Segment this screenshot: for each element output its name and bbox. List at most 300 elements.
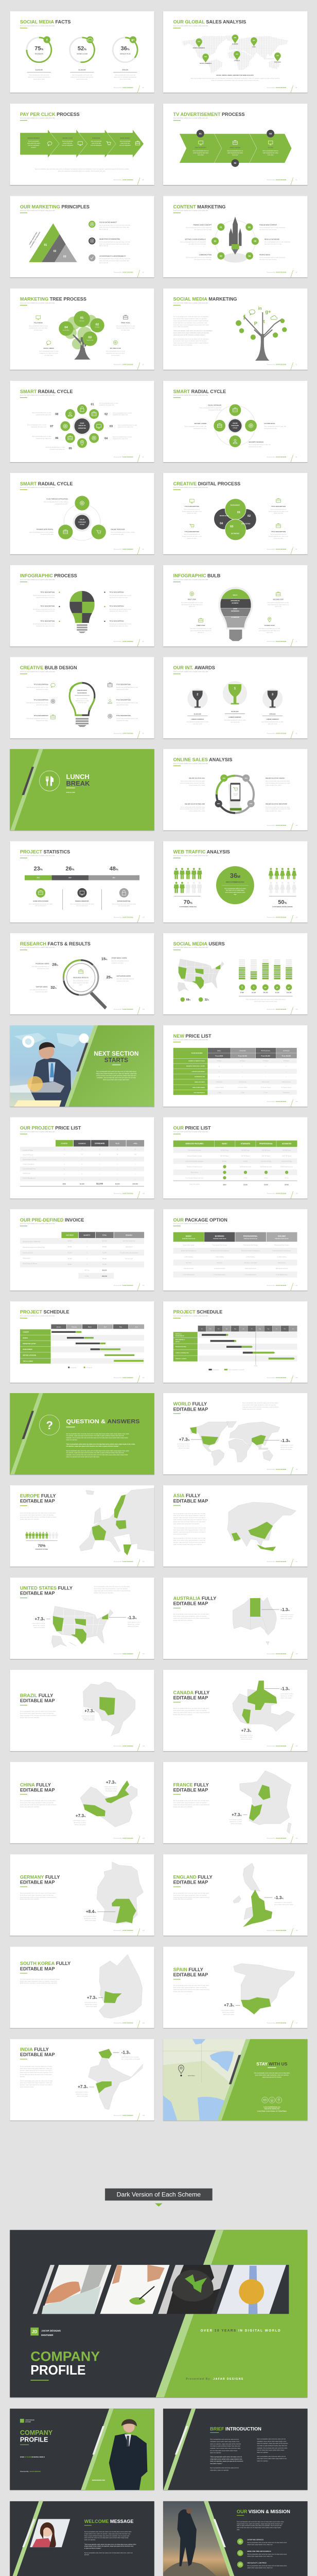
diagonal band xyxy=(10,749,43,831)
price table: $1,000 xyxy=(80,1183,84,1185)
body text: quasi architecto beatae vitae dicta sunt explicabo. xyxy=(173,1544,202,1546)
title: beatae vitae dicta sunt explicabo. xyxy=(173,1991,193,1993)
principle list: OBJECTIVES OF MARKETING xyxy=(99,238,120,240)
price table: Number of Pages xyxy=(23,1150,33,1151)
invoice table: 1 xyxy=(86,1258,87,1260)
price table: 2 Year xyxy=(241,1091,244,1093)
notes: Sed ut persp iciatis unde omnis iste natus xyxy=(181,806,205,808)
note text: requaemis iste natus error xyxy=(113,438,128,440)
footer: 117 xyxy=(295,1561,298,1563)
map stats: -1.3% xyxy=(280,1686,290,1691)
footer: Presented By: JAFAR DESIGNS xyxy=(267,1100,287,1103)
title: beatae vitae dicta sunt explicabo. xyxy=(94,1591,114,1594)
map stats: Lorem ipsum is only a xyxy=(128,1622,140,1623)
pin labels: 72% xyxy=(276,56,279,57)
notes xyxy=(184,404,286,448)
node labels: FINDING GOOD CONCEPT xyxy=(193,224,212,226)
prize text: eab requ omnis xyxy=(193,723,202,725)
heading and text: rem aperiam, eaque ipsa quae ab illo inventore vera hatis et quasi architecto beatae vitae dicta sunt xyxy=(66,1435,124,1437)
map stats: dummy text, to show xyxy=(222,2011,234,2013)
brand mark: JAFAR DESIGNS xyxy=(41,2330,61,2332)
tree diagram: Print Ads xyxy=(95,327,100,328)
slide: our price list xyxy=(163,1117,308,1198)
pin labels: AFRICA xyxy=(234,60,240,62)
step text: unde requaemis iste natus xyxy=(227,152,243,154)
footer: 89 xyxy=(295,271,297,273)
price table: From $6,000 xyxy=(282,1055,291,1057)
social icons and counts: t xyxy=(253,986,254,989)
body text: "Sed ut perspiciatis unde omnis iste natus error sit volup tatem accus antium dolor xyxy=(84,2543,136,2545)
slide: brief introduction xyxy=(163,2409,308,2490)
notes: sereqauemis iste alius xyxy=(41,533,54,535)
map stats xyxy=(82,1708,95,1721)
step text: TV ADS xyxy=(268,146,273,148)
title: SOUTH KOREA FULLY xyxy=(20,1961,71,1966)
slide: creative bulb design xyxy=(10,657,154,738)
price table: 500 MB Share xyxy=(241,1149,250,1151)
body text: accus antium dolor eaque laudantium totam rem aperiam, xyxy=(173,332,209,334)
notes: Sed eba gut perspiciatis lorem or und xyxy=(26,702,48,704)
package table: Anti Virus xyxy=(186,1262,192,1264)
outlined bulb: patteran lorem or unde xyxy=(76,700,89,702)
labels: FACEBOOK USERS xyxy=(36,962,49,964)
title: Insert your short subtitle here to explain a little about title xyxy=(173,1223,208,1225)
footer xyxy=(267,1007,298,1014)
footer: Presented By: JAFAR DESIGNS xyxy=(267,640,287,642)
map stats: -1.3% xyxy=(274,1895,284,1900)
notes: Sed ut persp iciatis unde omnis iste natus xyxy=(266,806,290,808)
body text column two: volup tatem accus antium dolor eaque lauda nt ium, xyxy=(257,2458,287,2460)
notes xyxy=(181,592,289,634)
pin labels: ASIA xyxy=(252,46,256,48)
price table: Assured Monthly Storage xyxy=(187,1155,202,1157)
node labels: 05 xyxy=(254,240,257,243)
slide: research facts and results xyxy=(10,933,154,1014)
body text: volup tatem accus antium dolor eaque lauda nt ium, xyxy=(210,2458,242,2460)
footer xyxy=(267,1652,298,1659)
footer: 124 xyxy=(143,1929,145,1931)
node labels: 03 xyxy=(220,255,222,257)
step text: Sed ut perspiciatis lorem or xyxy=(227,150,243,152)
social icons and counts: 356.2M xyxy=(287,991,292,993)
price table: From $2,000 xyxy=(238,1055,247,1057)
ring: sound cloud 52%: natus error sit voluptatem accusantium xyxy=(71,76,93,78)
heading: OVER 10 YEARS IN DIGITAL WORLD xyxy=(20,2456,45,2458)
footer: Presented By: JAFAR DESIGNS xyxy=(267,1837,287,1839)
slide: stay with us xyxy=(163,2039,308,2121)
side notes xyxy=(29,315,135,356)
node labels xyxy=(180,224,290,260)
body text: accus antium dolor eaque laudantium totam rem aperiam, xyxy=(173,340,207,342)
labels: requaemis iste natus xyxy=(37,968,49,970)
notes: requaemis iste natus error store xyxy=(110,596,128,598)
title: eaque ipsa quae ab illo inventore vera hatis et quasi architecto xyxy=(173,1617,210,1619)
price table: 3 Free xyxy=(264,1177,268,1179)
footer: Presented By: JAFAR DESIGNS xyxy=(114,1837,133,1839)
package table: 1000 Email Accounts xyxy=(275,1267,288,1269)
title: TV ADVERTISEMENT PROCESS xyxy=(173,112,245,117)
footer xyxy=(114,1652,145,1659)
title: Insert your short subtitle here to explain a little about title xyxy=(173,209,208,211)
petal labels: 04 xyxy=(220,522,223,525)
radial diagram: AREAS OF xyxy=(78,425,86,427)
body text: voluptatem accus antium dolor eaque lauda nt ium, xyxy=(210,2441,240,2443)
step text: PHOTOGRAPHY xyxy=(195,146,206,148)
side notes: sholup iste dolor xyxy=(187,512,197,514)
side notes: sholup iste dolor xyxy=(274,512,283,514)
pin labels: 22% xyxy=(236,54,239,55)
invoice table: $5,000 xyxy=(102,1258,107,1260)
title: Insert your short subtitle here to explain a little about title xyxy=(173,579,208,581)
body text: beatae vitae dicta sunt explicabo. xyxy=(173,344,193,346)
footer: Presented By: JAFAR DESIGNS xyxy=(267,456,287,458)
price table xyxy=(173,1048,297,1095)
gantt chart: PROTOTYPE LAYOUT xyxy=(23,1343,36,1345)
package table: Professional Web Design xyxy=(243,1244,258,1246)
title: EDITABLE MAP xyxy=(173,1880,208,1885)
body text: unde omnis iste natus error sit volup tatem accus antium dolor emque lauda xyxy=(237,2527,281,2529)
timeline bar: 2013 xyxy=(37,878,40,879)
timeline bar: 2015 xyxy=(113,878,115,879)
notes: FIRST STEP xyxy=(188,599,196,601)
south korea map xyxy=(99,1954,143,2019)
cycle diagram: ONLINE xyxy=(80,519,85,521)
title xyxy=(20,1494,57,1520)
germany map xyxy=(97,1862,144,1923)
title: EDITABLE MAP xyxy=(20,1499,55,1504)
contact text: STAY WITH US xyxy=(256,2061,288,2066)
caption: dicta sunt voluptatem accusantium dolor sunt explicabo. Sed ut perspic iatis unde. xyxy=(58,170,106,172)
footer: 85 xyxy=(295,87,297,89)
price table: ✕ xyxy=(64,1168,65,1170)
side notes: Sed ut perspiciatis lorem or xyxy=(271,509,286,510)
body text column two: totam rem aperiam. xyxy=(257,2460,269,2462)
invoice table: Domain and Host xyxy=(23,1251,33,1253)
node labels: iste natus error store sit volup xyxy=(195,258,212,260)
footer xyxy=(267,1836,298,1843)
side notes: TITLE DESCRIPTION xyxy=(185,531,199,533)
body text: "Sed ut perspiciatis unde omnis iste natus error sit voluptatem xyxy=(173,330,213,332)
footer: Presented By: JAFAR DESIGNS xyxy=(267,1745,287,1747)
title xyxy=(20,850,70,858)
heading xyxy=(30,2348,100,2381)
title xyxy=(20,573,77,582)
notes: SECURE LAYERS xyxy=(194,422,206,425)
gantt chart: April xyxy=(104,1326,107,1328)
contact text: www.lorem-website.com xyxy=(265,2108,280,2110)
footer: 104 xyxy=(143,1008,145,1010)
bulb labels: APPROPRIATE xyxy=(231,600,240,602)
notes: requaemis iste natus xyxy=(116,719,129,721)
prize text: LOREM COMPANY xyxy=(191,718,204,720)
heading and text: voepilcabo. Sed ut persipi iatis unde omnis iste natus error sit volup xyxy=(97,1076,136,1078)
title: accus antium dolor eaque laudantium, totam rem aperiam, xyxy=(173,1894,207,1896)
footer: Presented By: JAFAR DESIGNS xyxy=(114,1193,133,1195)
map stats: text, to show others a text space xyxy=(121,2058,140,2060)
prize text: LOREM COMPANY xyxy=(228,716,241,718)
radial diagram: SOME xyxy=(80,422,84,424)
invoice table: 2 xyxy=(86,1240,87,1242)
notes: requaemis iste natus error store xyxy=(110,625,128,627)
price table: 4 Pages xyxy=(217,1060,222,1062)
title: Insert your short subtitle here to explain a little about title xyxy=(173,1039,208,1041)
price table: ✓ xyxy=(99,1164,100,1165)
petal labels: PHOTOGRAPHY xyxy=(231,505,240,506)
title: OUR PROJECT PRICE LIST xyxy=(20,1125,81,1130)
price table: Professional MySQL Database xyxy=(186,1160,204,1162)
footer: Presented By: JAFAR DESIGNS xyxy=(267,1008,287,1010)
side notes: Sed ut perspiciatis lorem or xyxy=(271,534,286,535)
gantt chart: Sep xyxy=(267,1329,270,1330)
price table: Contact/Enquiry Form xyxy=(23,1167,36,1170)
diagonal band xyxy=(10,2501,43,2576)
callout circle: iste natus error sit voduip tatem xyxy=(226,889,244,891)
social icons and counts: 786.2M xyxy=(263,991,268,993)
gantt chart: Jun xyxy=(242,1329,245,1330)
map stats xyxy=(177,1436,294,1450)
title xyxy=(20,941,91,950)
title: CREATIVE BULB DESIGN xyxy=(20,665,77,670)
side notes: Iburalt requaemis iste natu s error xyxy=(182,510,202,512)
title: Insert your short subtitle here to explain a little about title xyxy=(20,670,55,672)
heading and text xyxy=(94,1050,138,1080)
notes xyxy=(180,777,290,812)
map stats: Lorem ipsum is only a xyxy=(75,2092,88,2093)
title xyxy=(173,850,230,858)
footer xyxy=(267,1559,298,1567)
pin labels xyxy=(193,38,281,64)
map stats xyxy=(84,1995,103,2007)
slide: brazil map xyxy=(10,1670,154,1751)
map stats: text, to show others a text space xyxy=(274,1904,293,1906)
numbered nodes xyxy=(212,224,259,260)
footer: Presented By: JAFAR DESIGNS xyxy=(114,1008,133,1010)
note text: requaemis iste natus error xyxy=(118,426,133,428)
map stats: +8.4% xyxy=(86,1909,96,1914)
map stats: others a text space xyxy=(85,1920,96,1922)
china map xyxy=(80,1781,137,1827)
map stats: +7.3% xyxy=(87,1995,97,2000)
petal diagram xyxy=(214,499,256,540)
social icons and counts: antium dolor eaque lauda tot bati, totam xyxy=(254,1000,277,1002)
body text column two: explicabo. Sed ut perspic iatis unde omnis iste natus xyxy=(257,2447,288,2449)
pin labels: 39% xyxy=(253,41,256,42)
map stats: others a text space xyxy=(86,2005,97,2007)
footer: Presented By: JAFAR DESIGNS xyxy=(267,271,287,273)
body text: et quasi architecto beatae." xyxy=(84,2547,102,2549)
body text: aperiam, eaque ipsa quae ab illo inventore vera hatis et xyxy=(20,2084,52,2086)
notes: ONLINE SALES IN CANADA xyxy=(266,777,285,779)
numbered markers: 02 xyxy=(234,162,237,164)
pin labels: OCEANIA xyxy=(274,61,281,63)
feature list: antium dolor eaque lauda nt ium, totam rem. xyxy=(247,2567,273,2569)
title: Sed ut perspiciatis unde omnis iste natus error sit volup tatem xyxy=(173,1708,209,1709)
caption: Sed ut perspiciatis unde omnis iste natus error sit voluptatem accusantium doloremque laudantium, totam rem aperiam, eaque ipsa quae ab illo inventore veritatis xyxy=(35,168,129,170)
notes: Sed eba gut perspiciatis lorem or und xyxy=(26,687,48,688)
note text: Sed ut perspiciatis lorem or unde xyxy=(118,425,137,426)
slide: marketing principles xyxy=(10,196,154,277)
package table: 10 Web Hosting xyxy=(277,1256,287,1258)
side notes: Iburalt requaemis iste natu s error xyxy=(269,510,288,512)
price table: 500 Email Accounts xyxy=(260,1166,272,1168)
trophies xyxy=(187,681,283,709)
heading: JAFAR DESIGNS xyxy=(25,2419,34,2421)
body text: volup tatem, totam rem aperiam. xyxy=(210,2469,229,2471)
notes xyxy=(33,591,131,627)
package table: Anti Virus xyxy=(217,1262,223,1264)
body text: hatis et quasi architecto beatae vitae dicta sunt explicabo. Sed ut perspic iatis xyxy=(237,2524,282,2527)
node labels: iste natus error store sit volup xyxy=(195,228,212,230)
ring: facebook 75%: 75% xyxy=(34,45,44,52)
side notes: TITLE DESCRIPTION xyxy=(271,531,286,533)
title: accus antium dolor eaque laudantium, totam rem aperiam, xyxy=(173,1987,207,1989)
notes: Sed ut perspiciatis lorem or unde. Iste xyxy=(264,426,286,427)
package table: Anti Virus + Anti Spam xyxy=(244,1262,257,1264)
price table: Unlimited MYSQL xyxy=(281,1160,292,1162)
gantt chart: Nov xyxy=(284,1329,286,1330)
labels xyxy=(30,957,134,993)
body text: Sed ut perspiciatis unde omnis iste natus error sit volup xyxy=(20,2066,52,2067)
invoice table: TOTAL xyxy=(85,1275,89,1277)
title: OUR MARKETING PRINCIPLES xyxy=(20,204,90,209)
invoice table: $4,500 xyxy=(68,1246,72,1248)
numbered notes xyxy=(50,403,113,450)
india map xyxy=(89,2049,143,2110)
notes: Sed ut persp iciatis unde omnis iste natus xyxy=(181,781,205,782)
footer: 91 xyxy=(295,364,297,366)
node labels: PUBLISH NEW CONTENT xyxy=(259,224,277,226)
notes: requaemis iste natus xyxy=(116,704,129,706)
slide: pay per click process xyxy=(10,104,154,185)
petal labels: 03 xyxy=(230,526,233,529)
notes: Sed eba gut perspiciatis lorem or und xyxy=(110,608,131,610)
invoice table: Extra Charge for Review xyxy=(23,1263,37,1265)
body text: Sed ut perspiciatis unde omnis iste natus error sit volup tatem latent ium, totam rem xyxy=(84,2552,133,2554)
title: Sed ut perspiciatis unde omnis iste natus error sit volup tatem xyxy=(242,1402,278,1404)
price table: $2000 xyxy=(285,1184,289,1186)
step text: Sed ut perspiciatis xyxy=(91,141,101,142)
title: CANADA FULLY xyxy=(173,1690,209,1695)
three stats: error sit volup tatem xyxy=(35,905,46,907)
slide: international awards xyxy=(163,657,308,738)
labels: INSTAGRAM USERS xyxy=(117,975,131,977)
footer xyxy=(267,639,297,647)
map stats xyxy=(240,1686,294,1740)
node labels: Sed ut perspiciatis lorem or unde requaemis xyxy=(180,242,206,243)
gantt chart: WIRE FRAMING & xyxy=(175,1339,185,1341)
price table: ✓ xyxy=(117,1164,118,1165)
notes: Sed ut perspiciatis lorem or unde. Iorbset xyxy=(29,532,54,533)
invoice table: $6,000 xyxy=(102,1269,107,1272)
numbered markers: 03 xyxy=(269,132,272,135)
ring with phone: 28% xyxy=(223,777,226,779)
footer: 97 xyxy=(295,640,297,642)
package table: Professional Web Development xyxy=(272,1250,291,1252)
three stats: error sit volup tatem xyxy=(118,905,130,907)
feature list xyxy=(237,2538,287,2569)
notes: Sed eba gut perspiciatis lorem or und xyxy=(116,718,138,719)
price table: 20 xyxy=(134,1148,136,1150)
step text: Sed ut perspiciatis xyxy=(28,141,39,142)
gantt chart xyxy=(20,1325,144,1369)
female pictogram chart: CUSTOMERS FROM EUROPE xyxy=(272,906,293,908)
title: EDITABLE MAP xyxy=(173,1407,208,1412)
green panels xyxy=(164,2230,307,2397)
title: AUSTRALIA FULLY xyxy=(173,1596,216,1601)
notes: ONLINE SALES IN SINGAPORE xyxy=(266,803,287,805)
title: EUROPE FULLY xyxy=(20,1494,56,1499)
map stats xyxy=(221,2003,240,2015)
title: accus antium dolor eaque laudantium, totam rem aperiam, xyxy=(242,1404,276,1406)
heading: BREAK xyxy=(66,779,90,787)
title: beatae vitae dicta sunt explicabo. xyxy=(20,1806,40,1808)
timeline bar: 48% xyxy=(110,866,118,872)
body text: perspic iatis unde omnis iste natus error sit volup tatem xyxy=(173,1521,205,1523)
map stats: Lorem ipsum is only a xyxy=(240,1735,253,1736)
notes: eab requaemis iste dolor sitae bo lor xyxy=(268,603,289,605)
labels: 25% xyxy=(107,975,113,979)
chevron band xyxy=(180,134,292,163)
body text: vera hatis et quasi." xyxy=(210,2462,223,2464)
note text: Sed ut perspiciatis lorem or unde xyxy=(46,447,65,448)
tree diagram: Television xyxy=(79,320,85,321)
title xyxy=(173,1217,227,1226)
title xyxy=(20,297,86,306)
price table: ✓ xyxy=(117,1174,118,1175)
body text: Sed ut perspiciatis unde omnis iste natus error sit volup tatem accus antium dolor xyxy=(84,2531,131,2533)
step text: error sit voluptatem xyxy=(91,144,102,146)
ring: google plus 36%: GOOGLE PLUS xyxy=(120,53,131,55)
map stats: others a text space xyxy=(280,1697,292,1699)
step text: Sed ut perspiciatis xyxy=(120,141,131,142)
body text: aperiam, eaque ipsa quae ab illo inventore vera hatis et xyxy=(20,2070,52,2072)
title: WEB TRAFFIC ANALYSIS xyxy=(173,850,230,855)
notes: Sed eba gut perspiciatis lorem or und xyxy=(110,623,131,625)
heading and text: totam rem aperiam. xyxy=(66,1439,78,1441)
slide: global sales analysis xyxy=(163,11,308,93)
price table: $1200 xyxy=(243,1184,248,1186)
prize text xyxy=(187,710,284,725)
ring: facebook 75% xyxy=(27,36,51,80)
body text: explicabo. Sed ut perspic iatis unde omnis iste natus xyxy=(210,2447,241,2449)
title: Insert your short subtitle here to explain a little about title xyxy=(20,25,55,27)
price table: ✓ xyxy=(99,1168,100,1170)
notes: error sit voluptat whom accusan from dolor xyxy=(180,808,205,810)
title: Insert your short subtitle here to explain a little about title xyxy=(20,855,55,857)
labels: requaemis iste natus xyxy=(117,980,129,982)
footer: Presented By: JAFAR DESIGNS xyxy=(114,640,133,642)
title: Insert your short subtitle here to explain a little about title xyxy=(20,302,55,304)
numbered notes: 08 xyxy=(55,413,58,416)
diagonal band xyxy=(10,1393,43,1475)
side notes: Sed ut perspiciatis lorem or xyxy=(184,534,200,535)
heading and text: STARTS xyxy=(104,1057,128,1063)
principle list: bitur te bitur ob xyxy=(99,262,108,264)
map stats: Lorem ipsum is only a xyxy=(32,1623,45,1624)
contact text: eaque ipsa quae ab illo inventore xyxy=(262,2076,282,2078)
title: accus antium dolor eaque laudantium, totam rem aperiam, xyxy=(20,1713,54,1715)
male pictogram chart: 70% xyxy=(184,900,192,906)
price table: ✓ xyxy=(265,1076,266,1078)
notes: Sed eba gut perspiciatis lorem or und xyxy=(33,595,55,596)
node labels: iste natus error store sit volup xyxy=(259,228,277,230)
diagonal band xyxy=(204,2501,237,2576)
price table: ✓ xyxy=(135,1164,136,1165)
ring: google plus 36%: g+ xyxy=(131,39,135,42)
social icons and counts: 678M xyxy=(240,991,244,993)
map stats: others a text space xyxy=(223,2013,235,2015)
labels: 28% xyxy=(52,962,59,967)
